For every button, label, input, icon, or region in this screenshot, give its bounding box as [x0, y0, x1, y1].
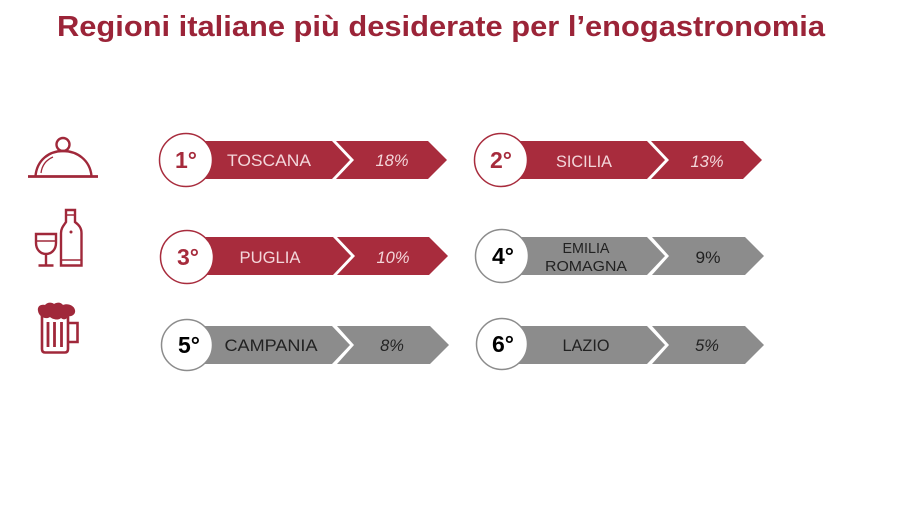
- name bar: [501, 141, 665, 179]
- name bar: [187, 237, 351, 275]
- value bar: [337, 237, 448, 275]
- rank number: 1°: [175, 147, 197, 173]
- percentage: 18%: [375, 152, 409, 170]
- rank 5: Campania: [162, 320, 449, 370]
- rank circle: [476, 230, 528, 282]
- rank circle: [474, 134, 528, 186]
- icon: serving cloche: [28, 138, 98, 176]
- name bar: [187, 326, 350, 364]
- percentage: 10%: [376, 249, 410, 267]
- rank 2: Sicilia: [474, 134, 762, 186]
- name bar: [502, 326, 665, 364]
- rank circle: [162, 320, 212, 370]
- rank circle: [160, 134, 212, 186]
- region name: LAZIO: [562, 337, 610, 355]
- region name: EMILIA: [562, 241, 610, 257]
- region name: CAMPANIA: [224, 337, 318, 355]
- rank number: 6°: [492, 331, 514, 357]
- rank number: 2°: [490, 147, 512, 173]
- rank number: 3°: [177, 244, 199, 270]
- rank circle: [160, 230, 214, 284]
- icon: wine glass and bottle: [36, 210, 82, 266]
- region name: SICILIA: [556, 153, 612, 171]
- percentage: 9%: [696, 249, 721, 267]
- value bar: [652, 326, 764, 364]
- value bar: [337, 326, 449, 364]
- rank number: 5°: [178, 332, 200, 358]
- value bar: [651, 141, 762, 179]
- value bar: [336, 141, 447, 179]
- name bar: [186, 141, 350, 179]
- rank 4: Emilia Romagna: [476, 230, 764, 282]
- region name: TOSCANA: [227, 152, 311, 170]
- percentage: 13%: [690, 153, 724, 171]
- value bar: [652, 237, 764, 275]
- rank circle: [476, 318, 528, 370]
- rank number: 4°: [492, 243, 514, 269]
- name bar: [502, 237, 665, 275]
- icon: beer mug: [38, 303, 78, 352]
- rank 1: Toscana: [160, 134, 447, 186]
- region name: PUGLIA: [240, 249, 300, 267]
- rank 4: Emilia Romagna: ROMAGNA: [545, 259, 627, 275]
- rank 3: Puglia: [160, 230, 448, 284]
- title: Regioni italiane più desiderate per l’enogastronomia: [57, 11, 826, 43]
- percentage: 5%: [695, 337, 719, 355]
- percentage: 8%: [380, 337, 404, 355]
- rank 6: Lazio: [476, 318, 764, 370]
